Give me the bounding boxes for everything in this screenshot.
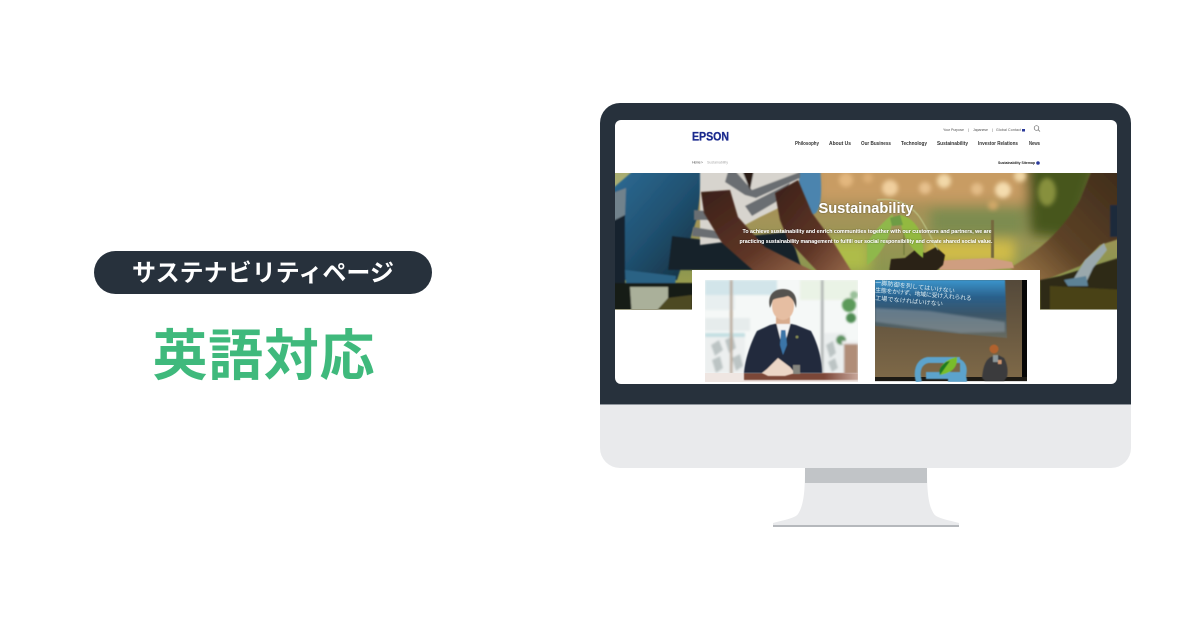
search icon — [1034, 126, 1040, 132]
navigation: Investor Relations — [978, 141, 1018, 147]
navigation: Technology — [901, 141, 927, 147]
hero text — [740, 201, 993, 245]
utility links — [943, 128, 1021, 132]
seedling — [867, 199, 938, 265]
background bokeh — [615, 173, 1058, 212]
hero text: practicing sustainability management to fulfill our social responsibility and create shared social value. — [740, 239, 993, 245]
utility links: | — [992, 128, 993, 132]
monitor — [600, 103, 1131, 527]
monitor chin — [600, 404, 1131, 468]
navigation: Our Business — [861, 141, 891, 147]
white card — [692, 270, 1040, 310]
striped shirt — [692, 165, 800, 245]
ground — [1040, 242, 1117, 309]
hero text: Sustainability — [818, 201, 914, 217]
projected slide: 生態をかけず、地域に受け入れられる — [875, 285, 972, 302]
breadcrumb: Home > — [692, 160, 703, 164]
photo: executive at desk — [705, 280, 858, 382]
breadcrumb: Sustainability — [707, 160, 728, 164]
man in suit — [744, 289, 822, 376]
hero image — [615, 173, 1117, 310]
navigation: News — [1029, 141, 1040, 147]
photo: speaker on stage — [875, 278, 1027, 382]
navigation — [795, 141, 1040, 146]
hero text: To achieve sustainability and enrich communities together with our customers and partners, we are — [742, 229, 992, 235]
navigation: Sustainability — [937, 141, 968, 147]
projected slide: 工場でなければいけない — [875, 293, 943, 308]
pill label — [94, 251, 432, 294]
utility links: Your Purpose — [943, 128, 964, 132]
background soft colour fields — [820, 173, 1092, 270]
logo sculpture — [918, 357, 967, 382]
sitemap link: Sustainability Sitemap — [998, 161, 1036, 165]
navigation: About Us — [829, 141, 851, 147]
speaker — [982, 344, 1008, 381]
utility links: Japanese — [973, 128, 988, 132]
utility links: | — [968, 128, 969, 132]
monitor bezel — [600, 103, 1131, 405]
jeans and body — [615, 173, 822, 309]
right person arm — [1010, 173, 1117, 282]
projected slide: 一脚防御を列してはいけない — [875, 278, 955, 295]
site header — [692, 126, 1040, 165]
soil — [889, 247, 945, 272]
breadcrumb — [692, 161, 728, 164]
hand — [935, 258, 1014, 270]
monitor stand — [773, 468, 959, 527]
child arms — [701, 180, 852, 272]
website screen — [605, 120, 1125, 384]
logo: EPSON — [692, 132, 729, 144]
projected slide — [875, 278, 1007, 338]
navigation: Philosophy — [795, 141, 819, 147]
title: 英語対応 — [152, 311, 374, 391]
utility links: Global Contact — [996, 128, 1021, 132]
pill label: サステナビリティページ — [132, 253, 394, 288]
